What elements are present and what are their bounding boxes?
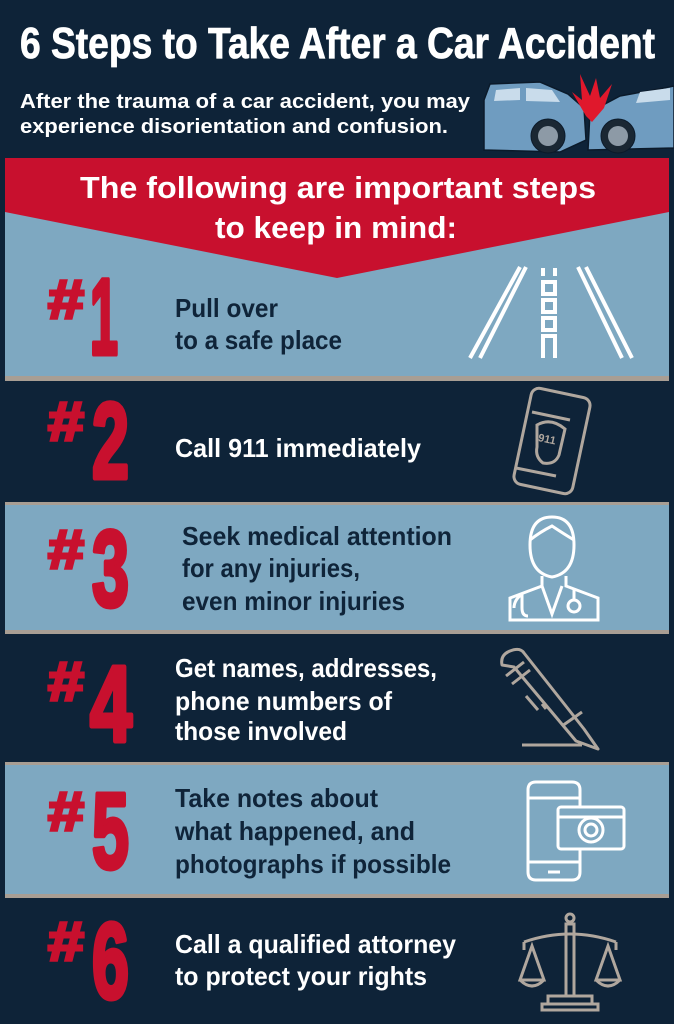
panel: step 3: for any injuries, <box>182 553 360 583</box>
icon: phone 911: 911 <box>537 432 557 447</box>
panel: step 5: # <box>48 780 84 842</box>
panel: step 4: 4 <box>90 643 132 764</box>
panel: step 6: # <box>48 910 84 972</box>
step 1: # <box>48 268 84 330</box>
panel: step 6: 6 <box>92 900 129 1021</box>
icon: pencil <box>502 649 598 749</box>
panel: step 4: phone numbers of <box>175 686 392 716</box>
panel: step 4: those involved <box>175 716 347 746</box>
panel: step 6: Call a qualified attorney <box>175 929 457 959</box>
banner: red header with arrow: The following are important steps <box>80 170 596 205</box>
panel: step 4: Get names, addresses, <box>175 653 437 683</box>
icon: doctor <box>510 517 598 620</box>
panel: step 3: 3 <box>92 508 129 629</box>
step 1: Pull over <box>175 293 278 323</box>
panel: step 5: what happened, and <box>174 816 415 846</box>
panel: step 3: Seek medical attention <box>182 521 452 551</box>
icon: road <box>470 267 632 358</box>
panel: step 3: even minor injuries <box>182 586 405 616</box>
panel: step 5: Take notes about <box>175 783 378 813</box>
panel: step 5: 5 <box>92 770 129 891</box>
subtitle <box>20 91 471 138</box>
panel: step 2 <box>48 380 592 501</box>
illustration: car crash <box>484 74 674 153</box>
panel: step 6: to protect your rights <box>175 961 427 991</box>
step 1 <box>48 256 632 377</box>
panel: step 2: 2 <box>92 380 129 501</box>
panel: step 3 <box>5 502 669 634</box>
panel: step 2: # <box>48 390 84 452</box>
subtitle: experience disorientation and confusion. <box>20 116 448 138</box>
panel: step 2: Call 911 immediately <box>175 433 422 463</box>
panel: step 1 background <box>5 200 669 381</box>
subtitle: After the trauma of a car accident, you may <box>20 91 471 113</box>
panel: step 5 <box>5 762 669 898</box>
banner: red header with arrow <box>5 158 669 278</box>
panel: step 4 <box>48 643 598 764</box>
icon: phone 911 <box>512 387 592 495</box>
icon: scales of justice <box>520 914 620 1010</box>
panel: step 6 <box>48 900 620 1021</box>
icon: phone and camera <box>528 782 624 880</box>
panel: step 4: # <box>48 650 84 712</box>
panel: step 3: # <box>48 518 84 580</box>
step 1: to a safe place <box>175 325 342 355</box>
panel: step 5: photographs if possible <box>175 849 451 879</box>
banner: red header with arrow: to keep in mind: <box>215 210 457 245</box>
step 1: 1 <box>90 256 118 377</box>
